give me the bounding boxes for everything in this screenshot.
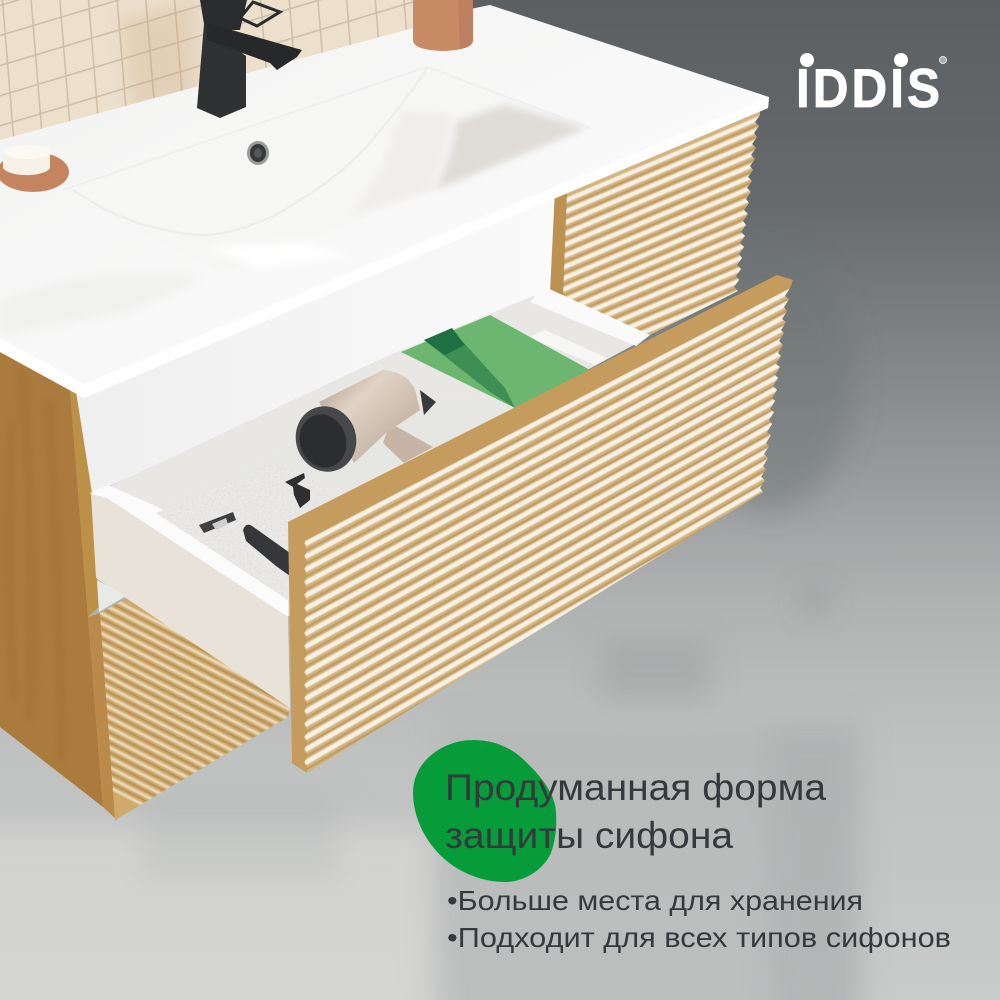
drain: [247, 141, 269, 165]
heading: Продуманная форма: [445, 767, 826, 808]
drawer left rim: [90, 485, 288, 617]
wall tiles: [0, 0, 415, 150]
wood grain: [9, 370, 62, 760]
green accent blob: [413, 740, 556, 882]
drawer face: [563, 108, 760, 340]
basin back rim highlight: [63, 67, 590, 190]
heading: защиты сифона: [445, 815, 733, 856]
iddis logo: IDDIS: [796, 59, 940, 120]
terracotta cup: [413, 0, 473, 51]
open drawer front panel: [288, 275, 793, 773]
drawer outer side wall: [91, 494, 290, 708]
drawer side strip: [550, 190, 567, 297]
basin: [0, 67, 590, 335]
apron under the basin: [75, 190, 555, 493]
ribbed face: [306, 288, 790, 773]
razor handle: [243, 525, 290, 576]
shaving razor head: [199, 512, 236, 533]
drawer floor: [150, 396, 520, 610]
bullet list: •Больше места для хранения: [447, 885, 863, 916]
storage pillow: [528, 330, 607, 365]
open drawer box: [90, 287, 650, 708]
left wooden side panel: [0, 340, 117, 820]
hair dryer: [287, 370, 436, 480]
bowl soft shading: [0, 105, 586, 335]
faucet: [197, 0, 302, 118]
soft shadow on the tiles behind the faucet: [120, 0, 195, 115]
blurred mirror reflection of the bathroom: [0, 250, 860, 1000]
soap dish: [0, 145, 69, 192]
wooden top and left edge: [288, 275, 793, 773]
lower ribbed wood compartment: [100, 598, 290, 820]
bullet list: •Подходит для всех типов сифонов: [447, 922, 951, 953]
drawer interior: [108, 296, 643, 617]
bowl inner rim curve: [73, 68, 427, 235]
upper closed drawer with ribbed wood: [550, 112, 760, 336]
panel tip strip: [88, 613, 117, 820]
foam towel: [156, 462, 340, 600]
countertop: [0, 5, 769, 398]
green glass shelf: [401, 315, 590, 408]
back rim of drawer: [530, 287, 650, 346]
panel lighter edge strip: [69, 380, 99, 617]
countertop bright front edge: [0, 97, 769, 398]
perfume bottle: [285, 473, 356, 520]
small white runner under drawer: [97, 580, 126, 612]
